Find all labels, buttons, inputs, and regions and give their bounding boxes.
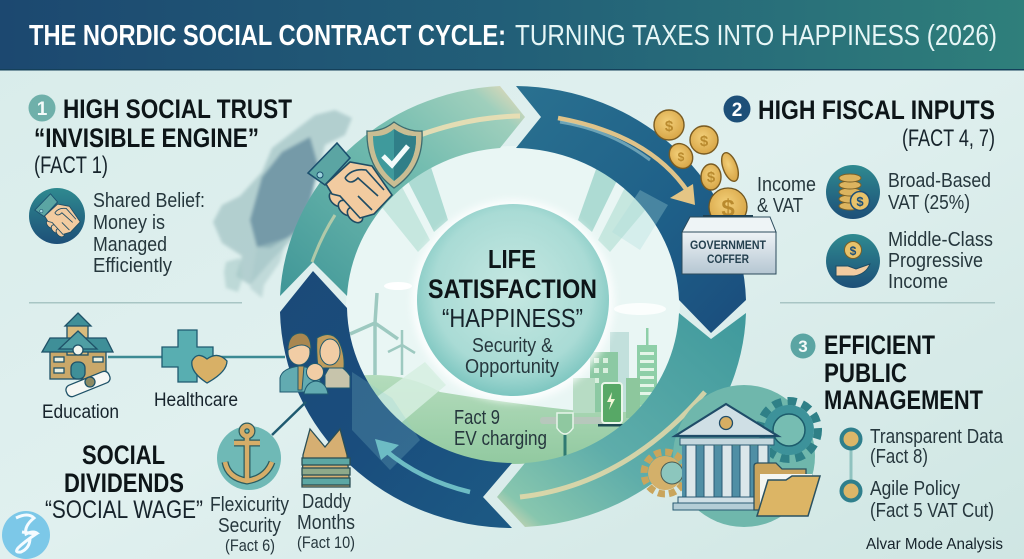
icon: big handshake and shield bbox=[308, 122, 422, 226]
cloud right bbox=[614, 303, 666, 315]
central orb bbox=[412, 200, 614, 402]
orb caption line 2: Opportunity bbox=[465, 356, 559, 378]
panel: high fiscal inputs bbox=[654, 95, 995, 293]
title bar bbox=[0, 0, 1024, 70]
connector: family to anchor bbox=[272, 402, 306, 435]
bullet: agile policy bbox=[842, 478, 994, 522]
label: flexicurity bbox=[210, 494, 289, 555]
subheading: social wage: “SOCIAL WAGE” bbox=[45, 496, 203, 524]
source credit: Alvar Mode Analysis bbox=[866, 536, 1003, 553]
number badge 3 bbox=[790, 334, 816, 358]
icon: coin stack badge: $ bbox=[856, 194, 864, 209]
bank building bbox=[673, 404, 778, 510]
beam: upper right light on navy bbox=[612, 190, 668, 250]
label: flexicurity: Security bbox=[218, 515, 281, 537]
text: shared belief: Shared Belief: bbox=[93, 190, 205, 212]
streak: cream trust flow bbox=[420, 116, 520, 135]
connector between bullets bbox=[850, 445, 852, 487]
cloud bbox=[384, 282, 412, 290]
number badge 2: 2 bbox=[732, 100, 742, 121]
heading: PUBLIC bbox=[824, 358, 907, 388]
text: middle-class income: Progressive bbox=[888, 250, 983, 272]
heading: social dividends: SOCIAL bbox=[82, 440, 165, 470]
text: shared belief bbox=[93, 190, 205, 277]
panel: social dividends bbox=[42, 313, 355, 555]
heading bbox=[824, 330, 983, 415]
label: daddy months: (Fact 10) bbox=[297, 533, 355, 552]
segment: dividends (navy lower left) bbox=[280, 271, 512, 528]
label: income and VAT bbox=[757, 174, 816, 217]
text: broad-based VAT: Broad-Based bbox=[888, 170, 991, 192]
label: daddy months bbox=[297, 491, 355, 552]
heading line 2: “INVISIBLE ENGINE” bbox=[34, 123, 259, 153]
label: income and VAT: & VAT bbox=[757, 195, 803, 217]
text: middle-class income bbox=[888, 229, 993, 293]
segment: trust (teal upper left) bbox=[280, 86, 525, 296]
coin dollar marks: $ bbox=[707, 169, 716, 186]
label: daddy months: Daddy bbox=[302, 491, 351, 513]
inner scene bbox=[340, 146, 690, 470]
number badge 2 bbox=[724, 96, 750, 122]
number badge 3: 3 bbox=[798, 337, 808, 356]
text: shared belief: Managed bbox=[93, 234, 167, 256]
icon: government coffer: $ bbox=[721, 195, 735, 222]
green ground bbox=[364, 375, 642, 464]
icon: hand with coin badge bbox=[826, 234, 880, 288]
fact reference: (FACT 4, 7) bbox=[902, 125, 995, 152]
text: broad-based VAT: VAT (25%) bbox=[888, 192, 970, 214]
icon: healthcare cross and heart bbox=[162, 330, 227, 383]
ev charging label: Fact 9 bbox=[454, 407, 500, 429]
charging station bbox=[602, 383, 622, 423]
connector: education to family bbox=[108, 356, 285, 358]
wind turbines bbox=[350, 293, 415, 375]
arrow: gold taxes flow bbox=[558, 118, 695, 205]
heading line 1: HIGH SOCIAL TRUST bbox=[63, 94, 292, 124]
bullet: transparent data: Transparent Data bbox=[870, 426, 1004, 448]
icon: shield bbox=[367, 122, 422, 188]
beam: lower left light on navy bbox=[352, 372, 420, 470]
coin dollar marks: $ bbox=[665, 118, 674, 135]
text: broad-based VAT bbox=[888, 170, 991, 214]
ev charging label bbox=[454, 407, 547, 450]
light rays bbox=[345, 158, 662, 445]
orb heading: LIFE bbox=[488, 244, 536, 274]
text: shared belief: Money is bbox=[93, 212, 165, 234]
heading: social dividends: DIVIDENDS bbox=[64, 468, 184, 498]
icon: diploma bbox=[64, 370, 112, 398]
heading: social dividends bbox=[64, 440, 184, 498]
folder bbox=[754, 463, 820, 516]
heading: EFFICIENT bbox=[824, 330, 935, 360]
ring: cycle segments bbox=[280, 86, 746, 528]
coin dollar marks bbox=[665, 118, 716, 186]
bullet: transparent data bbox=[842, 426, 1004, 468]
arrow: pale flow on navy bbox=[375, 439, 470, 492]
map: Scandinavia bbox=[213, 110, 352, 298]
orb subtitle: “HAPPINESS” bbox=[442, 303, 583, 333]
text: shared belief: Efficiently bbox=[93, 255, 172, 277]
ev charging label: EV charging bbox=[454, 428, 547, 450]
icon: school bbox=[42, 313, 113, 398]
icon: government coffer: GOVERNMENT bbox=[690, 238, 767, 252]
icon: handshake badge bbox=[29, 188, 85, 244]
streak: trust lower arc bbox=[312, 215, 335, 262]
segment: fiscal (navy upper right) bbox=[516, 86, 746, 333]
label: flexicurity: (Fact 6) bbox=[225, 536, 275, 555]
coin dollar marks: $ bbox=[678, 150, 685, 164]
icon: coin stack badge bbox=[826, 165, 880, 219]
label: daddy months: Months bbox=[297, 512, 355, 534]
number badge 1 bbox=[28, 94, 56, 122]
title: bold part: THE NORDIC SOCIAL CONTRACT CYCLE: bbox=[29, 20, 506, 52]
panel: high social trust bbox=[28, 94, 292, 277]
icon: family bbox=[280, 333, 350, 394]
heading: MANAGEMENT bbox=[824, 385, 983, 415]
segment: management (teal lower right) bbox=[497, 313, 746, 527]
text: middle-class income: Income bbox=[888, 271, 948, 293]
fact reference: (FACT 1) bbox=[34, 152, 108, 179]
icon: anchor bbox=[217, 426, 281, 490]
icon: government coffer bbox=[682, 188, 776, 274]
icon: hand with coin badge: $ bbox=[850, 244, 857, 258]
teal gear bbox=[760, 401, 818, 459]
label: income and VAT: Income bbox=[757, 174, 816, 196]
plug bbox=[557, 413, 573, 434]
orb heading line 2: SATISFACTION bbox=[428, 274, 597, 304]
icon: government coffer: COFFER bbox=[707, 252, 749, 266]
gold gear bbox=[644, 452, 686, 494]
bullet: transparent data: (Fact 8) bbox=[870, 446, 928, 468]
label: healthcare: Healthcare bbox=[154, 390, 238, 411]
label: education: Education bbox=[42, 402, 119, 423]
icon: life vest bbox=[302, 429, 350, 487]
icon: bank with gears and folder bbox=[644, 385, 820, 527]
bullet: agile policy: Agile Policy bbox=[870, 478, 960, 500]
panel: efficient public management bbox=[644, 330, 1004, 553]
logo badge bbox=[2, 511, 50, 559]
streak: cream management flow bbox=[520, 392, 705, 497]
coin dollar marks: $ bbox=[700, 133, 709, 150]
text: middle-class income: Middle-Class bbox=[888, 229, 993, 251]
orb caption line 1: Security & bbox=[472, 335, 554, 357]
road bbox=[540, 417, 610, 424]
label: flexicurity: Flexicurity bbox=[210, 494, 289, 516]
bullet: agile policy: (Fact 5 VAT Cut) bbox=[870, 500, 994, 522]
city and charger bbox=[540, 328, 657, 458]
icon: falling coins bbox=[654, 110, 742, 190]
number badge 1: 1 bbox=[37, 99, 48, 120]
